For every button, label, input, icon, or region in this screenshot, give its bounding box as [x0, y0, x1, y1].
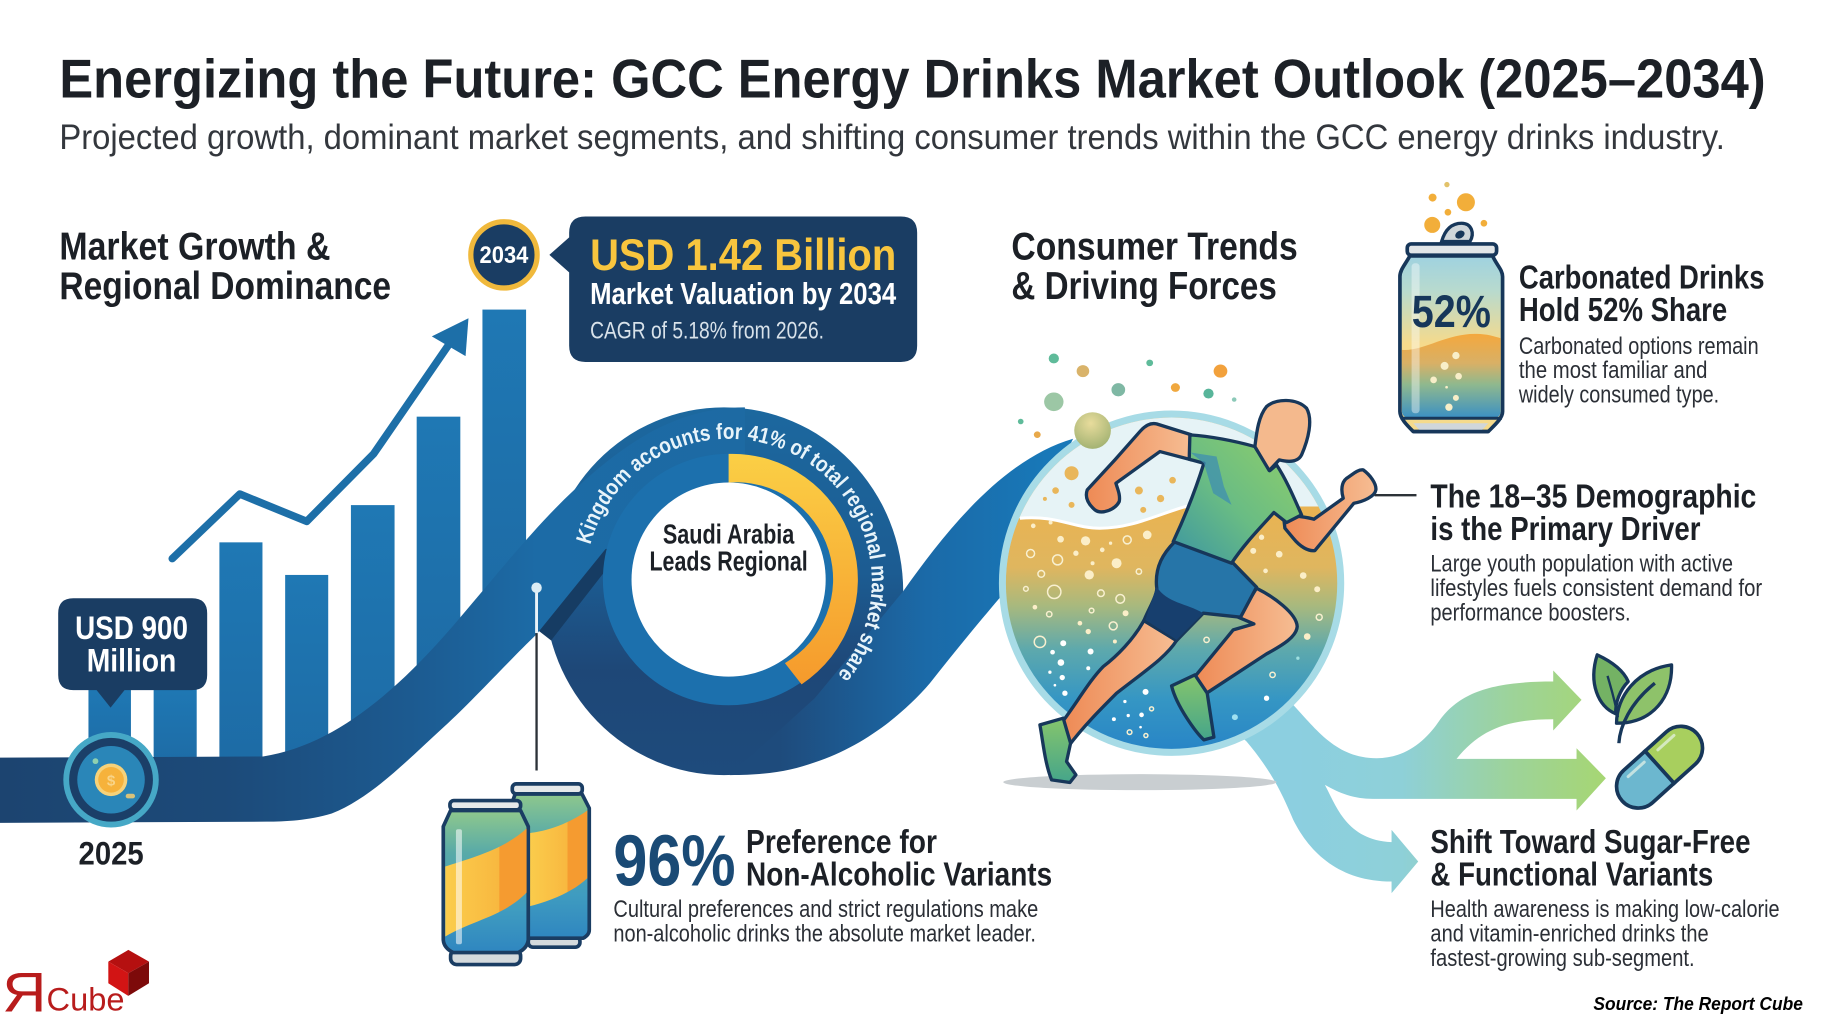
stat: 96% non-alcoholic: Non-Alcoholic Variants	[746, 857, 1052, 894]
text: sugar-free shift: fastest-growing sub-segment.	[1430, 945, 1695, 972]
text: sugar-free shift: & Functional Variants	[1430, 857, 1713, 894]
leader line: demographic	[1375, 494, 1416, 496]
donut label	[649, 519, 808, 576]
text: demographic: lifestyles fuels consistent demand for	[1430, 575, 1762, 602]
source note: Source: The Report Cube	[1593, 994, 1803, 1014]
text: carbonated drinks: Carbonated Drinks	[1519, 260, 1764, 297]
heading: consumer trends	[1011, 226, 1298, 308]
sphere: energy drink	[1000, 400, 1343, 752]
text: sugar-free shift	[1430, 824, 1780, 972]
icon: back can	[510, 784, 589, 947]
text: sugar-free shift: Shift Toward Sugar-Free	[1430, 824, 1751, 861]
year badge 2034	[471, 222, 537, 288]
runner	[1040, 401, 1376, 783]
text: demographic	[1430, 478, 1762, 626]
donut label: Leads Regional	[649, 545, 808, 576]
text: carbonated drinks	[1518, 260, 1764, 409]
stat: 96% non-alcoholic	[613, 822, 1052, 948]
stat: 96% non-alcoholic: Preference for	[746, 824, 937, 861]
icon: large bubble	[1074, 412, 1111, 449]
callout: USD 1.42 billion: CAGR of 5.18% from 2026.	[590, 318, 824, 345]
year badge 2034: 2034	[480, 242, 529, 269]
heading: consumer trends: & Driving Forces	[1011, 265, 1277, 308]
callout: USD 900 million	[58, 598, 207, 708]
text: sugar-free shift: and vitamin-enriched drinks the	[1430, 921, 1709, 948]
heading: market growth: Market Growth &	[59, 226, 331, 269]
icon: coin marker: $	[107, 773, 116, 790]
runner shadow	[1003, 774, 1277, 790]
donut chart: Saudi Arabia share	[617, 454, 858, 691]
icon: front can	[443, 801, 528, 965]
logo: RCube	[2, 950, 149, 1023]
heading: market growth	[59, 226, 391, 308]
subtitle: Projected growth, dominant market segments, and shifting consumer trends within the GCC energy drinks industry.	[59, 117, 1725, 157]
leader line: cans	[531, 583, 542, 770]
text: carbonated drinks: the most familiar and	[1519, 357, 1707, 384]
heading: consumer trends: Consumer Trends	[1011, 226, 1298, 269]
callout: USD 900 million: USD 900	[75, 610, 188, 646]
cans artwork (scaled group)	[443, 784, 589, 965]
icon: carbonated can: 52%	[1412, 286, 1491, 337]
heading: market growth: Regional Dominance	[59, 265, 391, 308]
icon: coin marker	[63, 732, 159, 827]
text: demographic: Large youth population with active	[1430, 550, 1733, 577]
stat: 96% non-alcoholic: non-alcoholic drinks the absolute market leader.	[613, 921, 1036, 948]
callout: USD 1.42 billion: USD 1.42 Billion	[590, 231, 896, 280]
arrows: shift to sugar-free and functional	[1227, 671, 1606, 893]
donut label: Saudi Arabia	[663, 519, 795, 550]
ribbon and loop	[0, 407, 1073, 823]
stat: 96% non-alcoholic: Cultural preferences and strict regulations make	[613, 896, 1038, 923]
curved text: regional share: Kingdom accounts for 41% of total regional market share	[576, 423, 886, 680]
callout: USD 1.42 billion	[549, 216, 917, 362]
label: 2025: 2025	[79, 836, 144, 872]
icon: carbonated can	[1400, 182, 1503, 432]
text: demographic: is the Primary Driver	[1430, 511, 1701, 548]
outside bubbles	[1018, 354, 1236, 438]
sphere bubbles	[1043, 466, 1176, 513]
logo: RCube: Cube	[47, 982, 125, 1018]
icon: capsule	[1608, 717, 1711, 817]
arrows and health icons (scaled group)	[1227, 655, 1711, 893]
bar chart: market growth	[88, 310, 526, 768]
stat: 96% non-alcoholic: 96%	[613, 822, 736, 902]
text: carbonated drinks: widely consumed type.	[1518, 382, 1719, 409]
callout: USD 1.42 billion: Market Valuation by 2034	[590, 278, 896, 311]
icon: leaves	[1594, 655, 1672, 743]
runner artwork (scaled group)	[1000, 400, 1376, 790]
text: demographic: performance boosters.	[1430, 599, 1631, 626]
logo: RCube: Я	[2, 960, 47, 1023]
callout: USD 900 million: Million	[87, 643, 176, 679]
arrow: growth trend	[172, 318, 468, 559]
text: carbonated drinks: Carbonated options remain	[1519, 333, 1759, 360]
text: carbonated drinks: Hold 52% Share	[1519, 292, 1727, 329]
text: demographic: The 18–35 Demographic	[1430, 478, 1756, 515]
